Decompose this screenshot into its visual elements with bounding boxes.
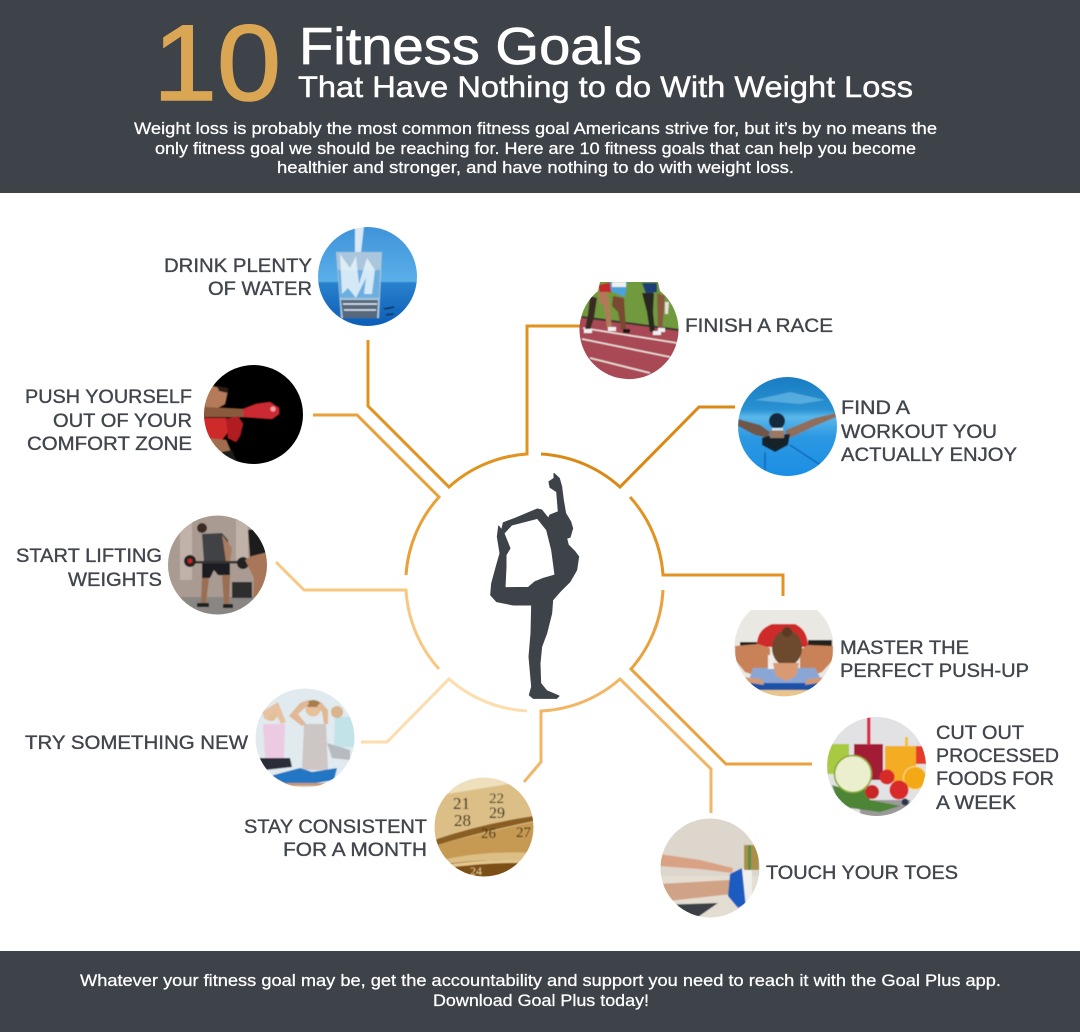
connector: workout	[541, 407, 735, 487]
label: WEIGHTS	[68, 569, 162, 591]
goal: cut out processed foods for a week	[826, 716, 1059, 818]
label	[16, 545, 162, 591]
photo: runners on track	[578, 280, 680, 382]
intro paragraph	[134, 120, 937, 177]
label: START LIFTING	[16, 545, 162, 567]
central diagram connectors	[276, 326, 812, 813]
label	[936, 722, 1059, 814]
icon: yoga silhouette	[491, 473, 579, 698]
intro paragraph: only fitness goal we should be reaching for. Here are 10 fitness goals that can help you become	[155, 140, 916, 158]
photo: weight lifters	[167, 515, 269, 617]
label: FOR A MONTH	[283, 839, 427, 861]
connector: toes and consistent	[524, 679, 711, 813]
photo: swimmer	[737, 376, 839, 478]
footer text	[80, 972, 1001, 1010]
photo: calendar: 24	[470, 864, 482, 878]
label: A WEEK	[936, 792, 1016, 814]
label	[244, 816, 427, 861]
subtitle: That Have Nothing to do With Weight Loss	[298, 71, 913, 104]
label: CUT OUT	[936, 722, 1024, 744]
label: TOUCH YOUR TOES	[766, 862, 958, 884]
footer text: Download Goal Plus today!	[433, 992, 649, 1010]
label: ACTUALLY ENJOY	[841, 444, 1017, 466]
connector: push-up	[630, 497, 783, 596]
goal: try something new	[25, 688, 356, 790]
connector: comfort zone	[313, 415, 439, 575]
photo: calendar: 26	[481, 826, 496, 842]
label: FINISH A RACE	[685, 315, 833, 337]
goal: find a workout you actually enjoy	[737, 376, 1017, 478]
photo: calendar: 29	[489, 805, 505, 822]
label	[840, 637, 1029, 682]
goal: stay consistent for a month	[244, 777, 534, 878]
label: OUT OF YOUR	[53, 410, 192, 432]
label	[25, 386, 192, 455]
big number 10: 10	[153, 2, 281, 123]
connector: lifting	[276, 562, 439, 669]
label: DRINK PLENTY	[164, 255, 312, 277]
goal: master the perfect push-up	[733, 609, 1029, 704]
intro paragraph: healthier and stronger, and have nothing to do with weight loss.	[277, 159, 794, 177]
label: OF WATER	[208, 278, 312, 300]
footer band	[0, 951, 1080, 1032]
label: TRY SOMETHING NEW	[25, 732, 249, 754]
goal: finish a race	[578, 280, 833, 382]
photo: calendar: 22	[489, 791, 504, 807]
connector: something new	[361, 679, 527, 742]
photo: stretching to toes	[659, 817, 761, 920]
footer text: Whatever your fitness goal may be, get the accountability and support you need to reach it with the Goal Plus app.	[80, 972, 1001, 990]
label: MASTER THE	[840, 637, 969, 659]
photo: calendar: 28	[454, 811, 471, 830]
title: Fitness Goals	[299, 18, 642, 76]
label: PUSH YOURSELF	[25, 386, 192, 408]
goal: drink plenty of water	[164, 226, 419, 328]
goal: push yourself out of your comfort zone	[25, 364, 305, 466]
photo: yoga class	[254, 688, 356, 790]
intro paragraph: Weight loss is probably the most common fitness goal Americans strive for, but it’s by no means the	[134, 120, 937, 138]
connector: water and race	[368, 326, 580, 487]
label: STAY CONSISTENT	[244, 816, 427, 838]
photo: push-up	[734, 610, 834, 696]
label: COMFORT ZONE	[27, 433, 192, 455]
header band	[0, 0, 1080, 193]
label: PROCESSED	[936, 745, 1059, 767]
label: FIND A	[841, 397, 910, 419]
goal: touch your toes	[659, 817, 958, 920]
connector: processed foods	[631, 590, 812, 764]
photo: calendar: 27	[516, 825, 532, 841]
label: FOODS FOR	[936, 768, 1054, 790]
photo: boxer	[203, 364, 305, 466]
label: WORKOUT YOU	[841, 421, 997, 443]
photo: calendar: 21	[453, 794, 470, 813]
goal: start lifting weights	[16, 515, 269, 617]
photo: calendar	[434, 777, 534, 878]
photo: glass of water	[317, 226, 419, 328]
photo: juices and fruit	[826, 716, 928, 818]
label	[164, 255, 312, 300]
label: PERFECT PUSH-UP	[840, 660, 1029, 682]
label	[841, 397, 1017, 466]
